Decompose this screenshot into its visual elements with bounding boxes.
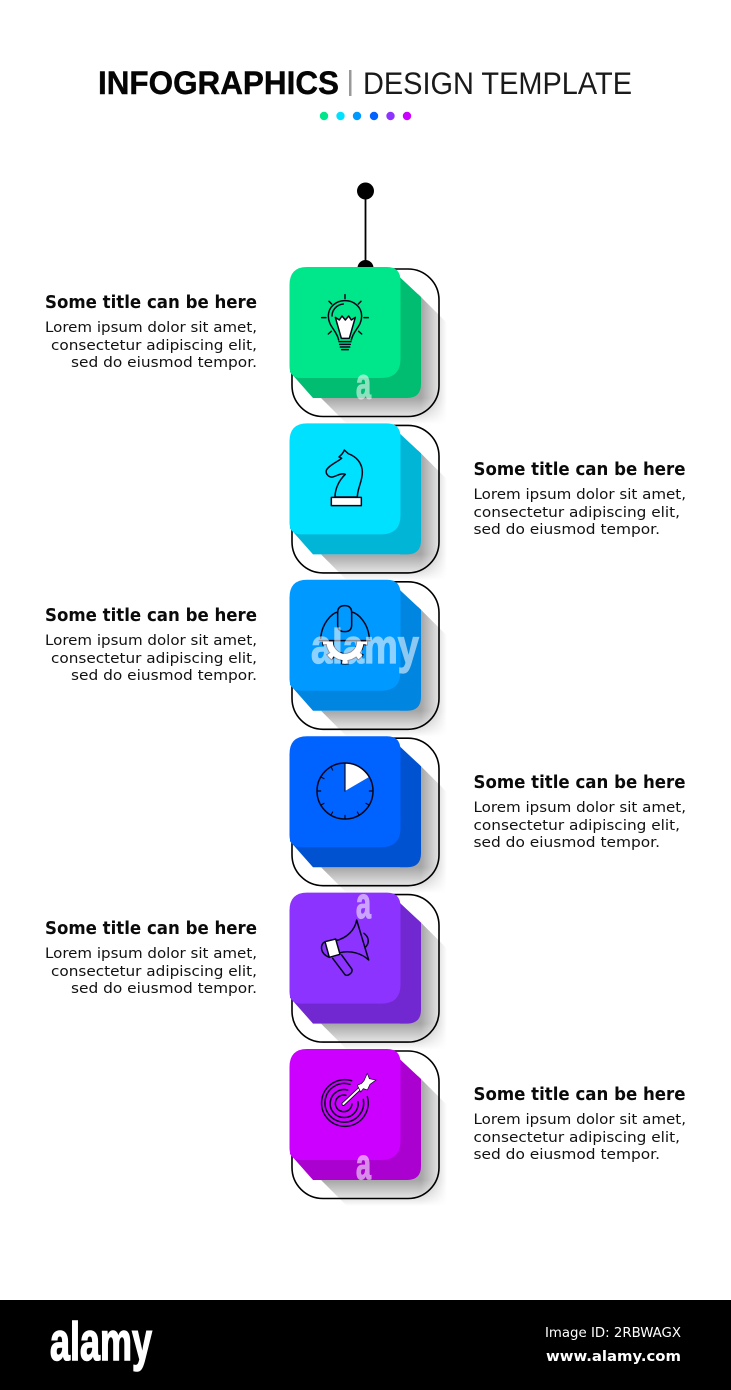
step 3 text: Some title can be here (45, 605, 257, 626)
step 2 text: sed do eiusmod tempor. (474, 522, 660, 538)
step 5 text (45, 918, 257, 997)
step 6 text: consectetur adipiscing elit, (474, 1130, 680, 1146)
step 4 text: Some title can be here (474, 772, 686, 793)
step 3 card (290, 580, 447, 737)
icon: megaphone (321, 920, 369, 975)
step 5 text: consectetur adipiscing elit, (51, 964, 257, 980)
icon: light bulb (322, 295, 368, 350)
icon: target and arrow (322, 1073, 376, 1126)
footer logo: alamy (50, 1312, 152, 1372)
step 5 text: Some title can be here (45, 918, 257, 939)
pin connector (357, 182, 374, 276)
step 2 text: consectetur adipiscing elit, (474, 505, 680, 521)
step 5 card (290, 879, 447, 1050)
step 4 text (474, 772, 686, 851)
step 4 text: sed do eiusmod tempor. (474, 835, 660, 851)
step 2 text: Lorem ipsum dolor sit amet, (474, 487, 686, 503)
image id: Image ID: 2RBWAGX (545, 1325, 681, 1341)
watermark: alamy: alamy (311, 621, 419, 674)
footer bar (0, 1300, 731, 1390)
step 3 text: Lorem ipsum dolor sit amet, (45, 633, 257, 649)
step 4 card (290, 736, 447, 893)
icon: clock (317, 763, 373, 819)
colour dots (320, 112, 411, 120)
step 6 text: sed do eiusmod tempor. (474, 1147, 660, 1163)
step 6 card (290, 1049, 447, 1206)
step 1 text (45, 292, 257, 371)
step 5 text: sed do eiusmod tempor. (71, 981, 257, 997)
step 3 text: consectetur adipiscing elit, (51, 651, 257, 667)
step 2 text (474, 459, 686, 538)
watermark letter: a (356, 879, 371, 928)
step 3 text: sed do eiusmod tempor. (71, 668, 257, 684)
watermark letter: a (356, 360, 371, 408)
step 4 text: consectetur adipiscing elit, (474, 818, 680, 834)
title (98, 65, 632, 101)
step 1 text: Lorem ipsum dolor sit amet, (45, 320, 257, 336)
step 1 text: Some title can be here (45, 292, 257, 313)
step 1 text: consectetur adipiscing elit, (51, 338, 257, 354)
title: DESIGN TEMPLATE (363, 65, 632, 101)
step 6 text (474, 1084, 686, 1163)
watermark letter: a (356, 1140, 371, 1189)
icon: helmet and gear (319, 606, 370, 662)
step 2 card (290, 423, 447, 580)
step 3 text (45, 605, 257, 684)
icon: chess knight (326, 450, 362, 506)
step 4 text: Lorem ipsum dolor sit amet, (474, 800, 686, 816)
step 1 card (290, 267, 447, 424)
step 5 text: Lorem ipsum dolor sit amet, (45, 946, 257, 962)
step 6 text: Lorem ipsum dolor sit amet, (474, 1112, 686, 1128)
step 6 text: Some title can be here (474, 1084, 686, 1105)
title: INFOGRAPHICS (98, 65, 339, 101)
website: www.alamy.com (546, 1349, 681, 1365)
step 1 text: sed do eiusmod tempor. (71, 355, 257, 371)
step 2 text: Some title can be here (474, 459, 686, 480)
